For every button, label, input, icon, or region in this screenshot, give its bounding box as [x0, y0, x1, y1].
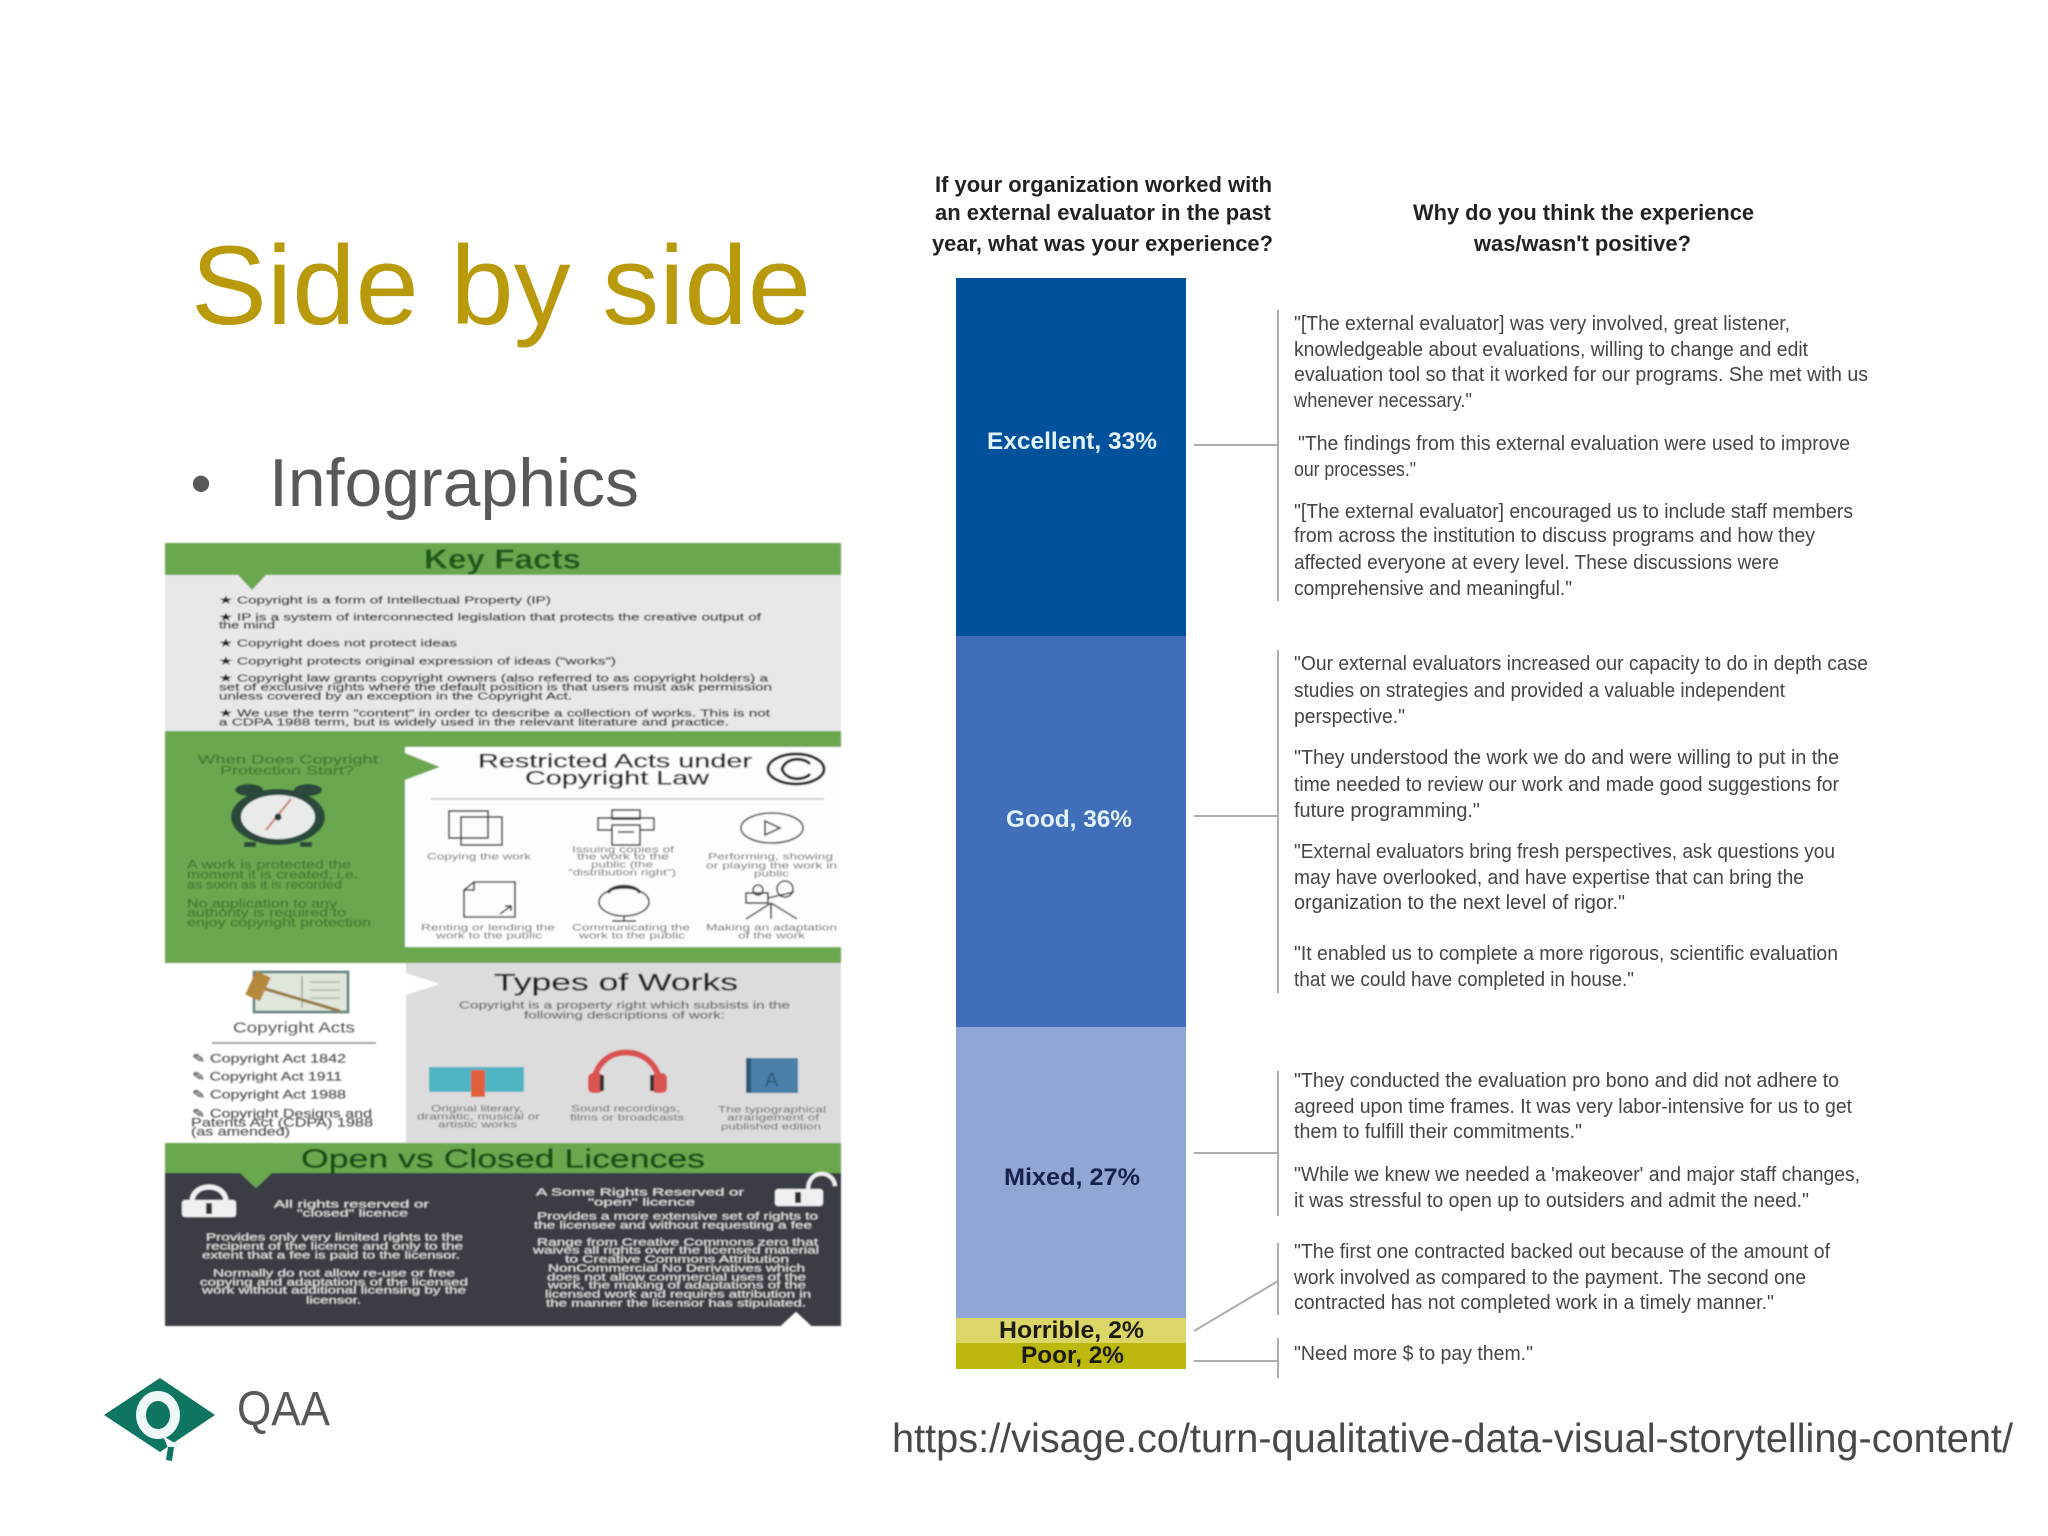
section: open vs closed licences: All rights reserved or — [274, 1198, 430, 1210]
quotes: excellent: "The findings from this external evaluation were used to improve — [1298, 433, 1850, 455]
icon: open lock — [775, 1174, 835, 1206]
quotes: good: "It enabled us to complete a more rigorous, scientific evaluation — [1294, 943, 1838, 965]
section: copyright acts: ✎ Copyright Designs and — [192, 1106, 372, 1120]
quotes: excellent: comprehensive and meaningful." — [1294, 578, 1572, 600]
section: key facts: ★ Copyright protects original expression of ideas ("works") — [219, 656, 616, 668]
section: when does copyright protection start: When Does Copyright — [198, 754, 379, 766]
chart headings — [932, 172, 1754, 256]
chart headings: year, what was your experience? — [932, 231, 1273, 256]
logo: QAA: QAA — [237, 1383, 330, 1436]
quotes: mixed: agreed upon time frames. It was very labor-intensive for us to get — [1294, 1096, 1852, 1118]
section: key facts — [165, 543, 841, 731]
quotes: good: that we could have completed in house." — [1294, 969, 1634, 991]
section: when does copyright protection start: Protection Start? — [220, 766, 354, 778]
stacked bar chart: Good, 36% — [1006, 806, 1132, 833]
section: types of works: Original literary, — [431, 1104, 523, 1114]
section: open vs closed licences: "open" licence — [588, 1196, 695, 1208]
section: when does copyright protection start: enjoy copyright protection — [187, 918, 371, 930]
icon: communicating — [599, 886, 649, 921]
section: open vs closed licences: Normally do not allow re-use or free — [213, 1268, 455, 1280]
quotes: excellent: "[The external evaluator] was very involved, great listener, — [1294, 313, 1790, 335]
chart headings: was/wasn't positive? — [1473, 231, 1691, 256]
section: restricted acts: Copying the work — [427, 852, 532, 862]
stacked bar chart: Mixed, 27% — [1004, 1164, 1140, 1191]
quotes: excellent: affected everyone at every level. These discussions were — [1294, 552, 1779, 574]
section: when does copyright protection start: A work is protected the — [187, 860, 351, 872]
quotes: good: time needed to review our work and made good suggestions for — [1294, 774, 1839, 796]
section: when does copyright protection start — [165, 731, 841, 963]
bullet: Infographics: • — [190, 450, 212, 517]
section: open vs closed licences: the manner the licensor has stipulated. — [546, 1298, 806, 1310]
section: restricted acts: Communicating the — [572, 922, 690, 932]
section: open vs closed licences: recipient of the licence and only to the — [206, 1240, 463, 1252]
icon: alarm clock — [231, 784, 325, 847]
quotes: mixed: them to fulfill their commitments." — [1294, 1121, 1582, 1143]
section: key facts: Key Facts — [424, 544, 581, 574]
stacked bar chart: Horrible, 2% — [999, 1317, 1144, 1344]
quotes: excellent — [1293, 313, 1868, 600]
section: restricted acts: "distribution right") — [568, 868, 676, 878]
section: restricted acts: Performing, showing — [708, 852, 833, 862]
section: key facts: unless covered by an exception in the Copyright Act. — [219, 690, 572, 702]
quotes: excellent: whenever necessary." — [1293, 390, 1472, 412]
section: open vs closed licences: work, the making of adaptations of the — [547, 1280, 806, 1292]
icon: headphones — [588, 1052, 667, 1093]
section: open vs closed licences: licensor. — [306, 1294, 361, 1306]
icon: closed lock — [182, 1187, 236, 1217]
section: open vs closed licences: waives all rights over the licensed material — [532, 1244, 819, 1256]
section: open vs closed licences: Range from Creative Commons zero that — [537, 1236, 818, 1248]
section: open vs closed licences: licensed work and requires attribution in — [545, 1288, 811, 1300]
quotes: excellent: our processes." — [1294, 459, 1416, 481]
section: copyright acts: Copyright Acts — [233, 1020, 355, 1036]
section: when does copyright protection start: as soon as it is recorded — [187, 880, 342, 892]
title: Side by side — [191, 223, 811, 348]
quotes: mixed: "While we knew we needed a 'makeover' and major staff changes, — [1294, 1164, 1860, 1186]
chart headings: If your organization worked with — [935, 172, 1272, 197]
section: restricted acts — [405, 747, 841, 947]
icon: blue book: A — [765, 1070, 779, 1092]
section: restricted acts: Renting or lending the — [421, 922, 555, 932]
section: when does copyright protection start: authority is required to — [187, 908, 346, 920]
section: restricted acts: Restricted Acts under — [478, 752, 753, 772]
section: key facts: a CDPA 1988 term, but is widely used in the relevant literature and practice. — [219, 716, 729, 728]
section: copyright acts: ✎ Copyright Act 1842 — [192, 1052, 346, 1066]
section: open vs closed licences — [165, 1143, 841, 1326]
quotes: horrible: contracted has not completed work in a timely manner." — [1294, 1292, 1774, 1314]
section: restricted acts: work to the public — [434, 930, 543, 940]
quotes: mixed — [1294, 1070, 1860, 1212]
section: types of works: artistic works — [438, 1120, 518, 1130]
section: open vs closed licences: copying and adaptations of the licensed — [200, 1276, 468, 1288]
section: open vs closed licences: NonCommercial No Derivatives which — [548, 1262, 805, 1274]
stacked bar chart — [956, 278, 1186, 1369]
quotes: horrible — [1293, 1241, 1830, 1314]
section: types of works: Sound recordings, — [571, 1104, 680, 1114]
section: restricted acts: of the work — [738, 930, 806, 940]
connector brackets — [1194, 310, 1278, 1378]
section: copyright acts: Patents Act (CDPA) 1988 — [191, 1116, 373, 1130]
icon: play — [741, 813, 803, 843]
section: key facts: ★ Copyright law grants copyright owners (also referred to as copyright holders) a — [219, 672, 768, 684]
quotes: good: future programming." — [1294, 800, 1480, 822]
quotes: good: "They understood the work we do and were willing to put in the — [1294, 747, 1839, 769]
icon: copying — [449, 811, 502, 845]
section: open vs closed licences: work without additional licensing by the — [201, 1284, 466, 1296]
section: open vs closed licences: "closed" licence — [297, 1208, 408, 1220]
section: restricted acts: or playing the work in — [706, 860, 837, 870]
section: types of works: dramatic, musical or — [417, 1112, 540, 1122]
quotes: good — [1294, 653, 1868, 991]
section: when does copyright protection start: moment it is created, i.e. — [187, 870, 358, 882]
quotes: mixed: "They conducted the evaluation pro bono and did not adhere to — [1294, 1070, 1839, 1092]
section: open vs closed licences: Provides a more extensive set of rights to — [537, 1210, 818, 1222]
section: open vs closed licences: Open vs Closed Licences — [301, 1144, 705, 1174]
icon: open book — [429, 1067, 524, 1097]
section: open vs closed licences: Provides only very limited rights to the — [206, 1232, 463, 1244]
quotes: excellent: "[The external evaluator] encouraged us to include staff members — [1294, 501, 1853, 523]
icon: gavel and book — [245, 971, 348, 1012]
quote: poor: "Need more $ to pay them." — [1294, 1343, 1533, 1365]
source URL: https://visage.co/turn-qualitative-data-visual-storytelling-content/ — [892, 1415, 2014, 1461]
panel: copyright infographic — [165, 543, 841, 1326]
section: types of works: films or broadcasts — [570, 1112, 685, 1122]
section: open vs closed licences: extent that a fee is paid to the licensor. — [202, 1250, 460, 1262]
stacked bar chart: Excellent, 33% — [987, 428, 1157, 455]
section: key facts: ★ IP is a system of interconnected legislation that protects the creative output of — [219, 612, 761, 624]
section: open vs closed licences: A Some Rights Reserved or — [536, 1186, 745, 1198]
section: restricted acts: Making an adaptation — [706, 922, 837, 932]
section: restricted acts: Copyright Law — [525, 768, 709, 790]
panel: survey chart — [932, 172, 1868, 1378]
section: key facts: set of exclusive rights where the default position is that users must ask permission — [219, 682, 772, 694]
section: key facts: ★ Copyright does not protect ideas — [219, 638, 457, 650]
section: copyright acts: (as amended) — [191, 1124, 290, 1138]
quotes: excellent: from across the institution to discuss programs and how they — [1294, 525, 1815, 547]
section: copyright acts — [191, 971, 376, 1138]
section: types of works: following descriptions of work: — [524, 1010, 725, 1022]
quotes: good: organization to the next level of rigor." — [1294, 892, 1625, 914]
section: restricted acts: public — [754, 868, 790, 878]
section: types of works: The typographical — [718, 1104, 826, 1114]
quotes: horrible: "The first one contracted backed out because of the amount of — [1294, 1241, 1830, 1263]
logo: QAA — [104, 1378, 330, 1461]
section: when does copyright protection start: No application to any — [187, 898, 337, 910]
quotes: mixed: it was stressful to open up to outsiders and admit the need." — [1294, 1190, 1809, 1212]
quotes: excellent: knowledgeable about evaluations, willing to change and edit — [1294, 339, 1808, 361]
section: copyright acts: ✎ Copyright Act 1911 — [192, 1070, 342, 1084]
section: restricted acts: Issuing copies of — [572, 844, 675, 854]
icon: printer — [598, 810, 654, 845]
section: restricted acts: the work to the — [577, 852, 669, 862]
icon: renting document — [464, 882, 515, 917]
section: key facts: ★ We use the term "content" in order to describe a collection of works. This is not — [219, 708, 770, 720]
section: key facts: ★ Copyright is a form of Intellectual Property (IP) — [219, 594, 551, 606]
section: open vs closed licences: the licensee and without requesting a fee — [534, 1220, 812, 1232]
quotes: good: studies on strategies and provided a valuable independent — [1294, 680, 1785, 702]
stacked bar chart: Poor, 2% — [1021, 1342, 1124, 1369]
section: types of works: Types of Works — [494, 970, 738, 996]
section: types of works: Copyright is a property right which subsists in the — [459, 1000, 790, 1012]
quotes: good: "Our external evaluators increased our capacity to do in depth case — [1294, 653, 1868, 675]
icon: copyright symbol — [768, 754, 824, 784]
quotes: good: "External evaluators bring fresh perspectives, ask questions you — [1294, 841, 1835, 863]
quotes: good: perspective." — [1294, 706, 1405, 728]
icon: film camera — [746, 881, 797, 919]
quotes: excellent: evaluation tool so that it worked for our programs. She met with us — [1294, 364, 1868, 386]
quotes: horrible: work involved as compared to the payment. The second one — [1293, 1267, 1806, 1289]
quotes: good: may have overlooked, and have expertise that can bring the — [1294, 867, 1804, 889]
section: copyright acts: ✎ Copyright Act 1988 — [192, 1088, 346, 1102]
section: types of works: arrangement of — [727, 1112, 820, 1122]
section: key facts: the mind — [219, 620, 275, 632]
section: restricted acts: public (the — [591, 860, 653, 870]
section: restricted acts: work to the public — [577, 930, 686, 940]
chart headings: an external evaluator in the past — [935, 200, 1272, 225]
chart headings: Why do you think the experience — [1413, 200, 1754, 225]
section: open vs closed licences: does not allow commercial uses of the — [547, 1272, 806, 1284]
icon: blue book — [746, 1058, 798, 1093]
bullet: Infographics: Infographics — [269, 445, 639, 521]
section: types of works — [406, 963, 841, 1143]
section: open vs closed licences: to Creative Commons Attribution — [565, 1254, 789, 1266]
section: types of works: published edition — [721, 1122, 821, 1132]
